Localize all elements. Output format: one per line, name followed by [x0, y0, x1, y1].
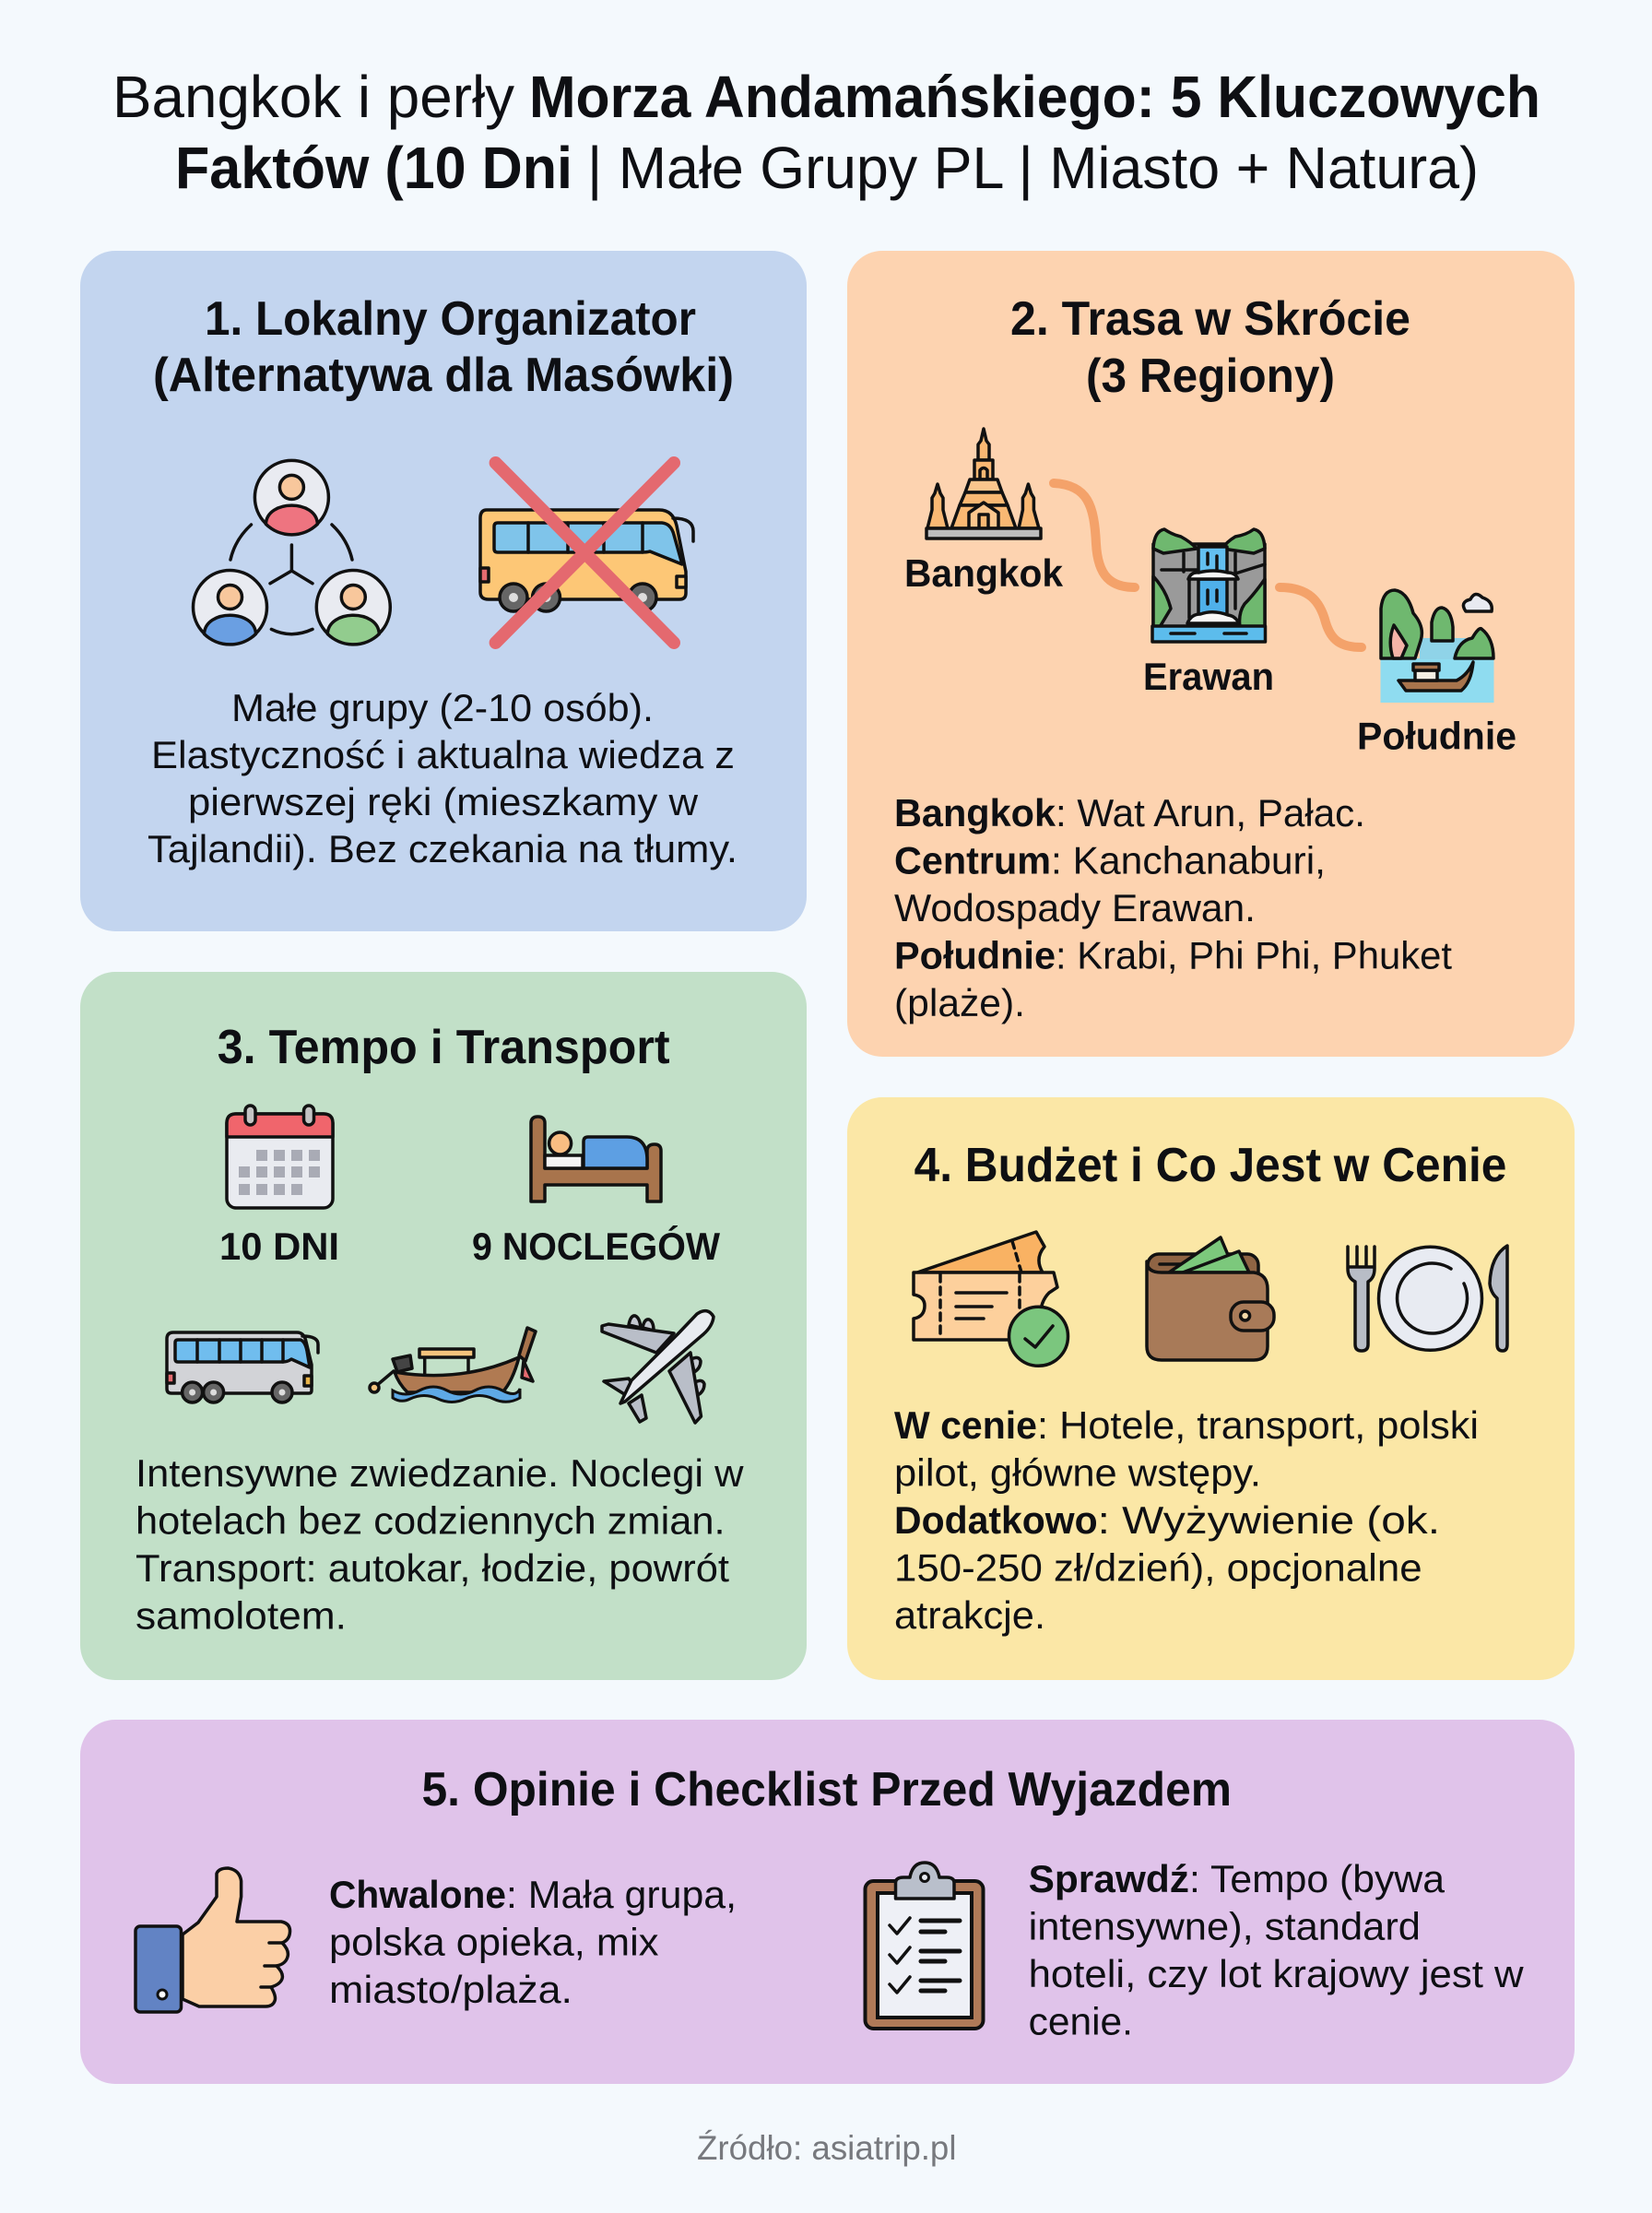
text: panel 1 body: pierwszej ręki (mieszkamy w	[188, 780, 699, 823]
text: panel 2 body	[894, 791, 1452, 1024]
text: panel 2 body: : Krabi, Phi Phi, Phuket	[1056, 933, 1452, 977]
text: panel 2 body: (plaże).	[894, 981, 1025, 1024]
title: | Małe Grupy PL | Miasto + Natura)	[587, 135, 1479, 201]
heading: panel 1: (Alternatywa dla Masówki)	[153, 349, 734, 402]
label: Bangkok: Bangkok	[904, 551, 1064, 595]
text: panel 2 body: Wodospady Erawan.	[894, 886, 1256, 929]
text: panel 4 body: atrakcje.	[894, 1593, 1045, 1637]
text: panel 2 body: Południe	[894, 933, 1056, 977]
text: check: intensywne), standard	[1029, 1905, 1421, 1947]
text: panel 2 body: : Kanchanaburi,	[1051, 839, 1326, 882]
text: check: cenie.	[1029, 1999, 1133, 2043]
heading: panel 4: 4. Budżet i Co Jest w Cenie	[914, 1139, 1506, 1192]
heading: panel 1: 1. Lokalny Organizator	[205, 292, 696, 346]
panel: 3 pace and transport	[80, 972, 807, 1680]
icon: tickets with check mark	[914, 1232, 1068, 1366]
text: panel 2 body: : Wat Arun, Pałac.	[1056, 791, 1365, 834]
heading: panel 3: 3. Tempo i Transport	[218, 1021, 670, 1074]
label: Południe: Południe	[1357, 714, 1516, 758]
icon: bed	[531, 1117, 661, 1201]
panel: 4 budget	[847, 1097, 1575, 1680]
text: panel 3 body: samolotem.	[136, 1593, 347, 1638]
title	[112, 64, 1540, 201]
title: Faktów (10 Dni	[175, 135, 572, 201]
panel: 1 local organizer	[80, 251, 807, 931]
text: panel 3 body: Intensywne zwiedzanie. Noclegi w	[136, 1451, 744, 1495]
text: praised: miasto/plaża.	[329, 1968, 572, 2011]
text: panel 1 body: Małe grupy (2-10 osób).	[231, 686, 654, 729]
icon: clipboard checklist	[865, 1863, 983, 2029]
arrow: route Bangkok to Erawan	[1054, 483, 1135, 587]
arrow: route Erawan to south	[1280, 587, 1362, 647]
text: panel 4 body: : Wyżywienie (ok.	[1098, 1498, 1440, 1542]
label: 9 nights: 9 NOCLEGÓW	[472, 1224, 720, 1268]
icon: longtail boat	[370, 1328, 536, 1402]
label: 10 days: 10 DNI	[219, 1225, 339, 1268]
text: panel 4 body	[894, 1403, 1479, 1637]
heading: panel 2	[1010, 292, 1410, 403]
icon: wallet	[1147, 1237, 1274, 1360]
text: panel 1 body	[148, 686, 738, 870]
icon: coach	[167, 1332, 318, 1402]
label: Erawan: Erawan	[1143, 655, 1274, 698]
panel: 2 route	[847, 251, 1575, 1057]
icon: airplane	[602, 1311, 714, 1423]
heading: panel 2: 2. Trasa w Skrócie	[1010, 292, 1410, 346]
text: panel 2 body: Centrum	[894, 839, 1051, 882]
text: panel 4 body: : Hotele, transport, polski	[1037, 1403, 1479, 1447]
text: panel 1 body: Tajlandii). Bez czekania na tłumy.	[148, 827, 738, 870]
text: panel 1 body: Elastyczność i aktualna wiedza z	[151, 733, 735, 776]
text: check: hoteli, czy lot krajowy jest w	[1029, 1952, 1524, 1995]
icon: crossed-out bus	[480, 463, 693, 643]
title: Morza Andamańskiego: 5 Kluczowych	[529, 64, 1540, 130]
title: Bangkok i perły	[112, 64, 514, 130]
text: panel 4 body: pilot, główne wstępy.	[894, 1451, 1261, 1494]
text: praised	[329, 1873, 737, 2011]
text: praised: : Mała grupa,	[506, 1873, 737, 1916]
text: panel 2 body: Bangkok	[894, 791, 1056, 834]
text: praised: Chwalone	[329, 1873, 506, 1916]
panel: 5 reviews and checklist	[80, 1720, 1575, 2084]
icon: plate with cutlery	[1348, 1246, 1507, 1351]
icon: calendar	[227, 1106, 333, 1208]
text: panel 3 body: hotelach bez codziennych zmian.	[136, 1499, 726, 1542]
text: check: : Tempo (bywa	[1189, 1857, 1446, 1900]
icon: thumbs up	[136, 1868, 290, 2012]
heading: panel 2: (3 Regiony)	[1086, 349, 1335, 403]
icon: southern islands with boat	[1381, 590, 1493, 703]
text: panel 4 body: Dodatkowo	[894, 1498, 1098, 1542]
text: check: Sprawdź	[1029, 1857, 1189, 1900]
text: check	[1029, 1857, 1524, 2043]
text: praised: polska opieka, mix	[329, 1920, 658, 1964]
source footer: Źródło: asiatrip.pl	[697, 2129, 957, 2167]
icon: Wat Arun temple	[926, 429, 1041, 538]
heading: panel 5: 5. Opinie i Checklist Przed Wyjazdem	[422, 1763, 1232, 1817]
heading: panel 1	[153, 292, 734, 402]
text: panel 4 body: W cenie	[894, 1403, 1037, 1447]
text: panel 3 body: Transport: autokar, łodzie, powrót	[136, 1546, 729, 1590]
text: panel 3 body	[136, 1451, 744, 1638]
text: panel 4 body: 150-250 zł/dzień), opcjonalne	[894, 1545, 1422, 1590]
icon: Erawan waterfall	[1152, 529, 1265, 642]
icon: group of three people	[194, 460, 390, 645]
